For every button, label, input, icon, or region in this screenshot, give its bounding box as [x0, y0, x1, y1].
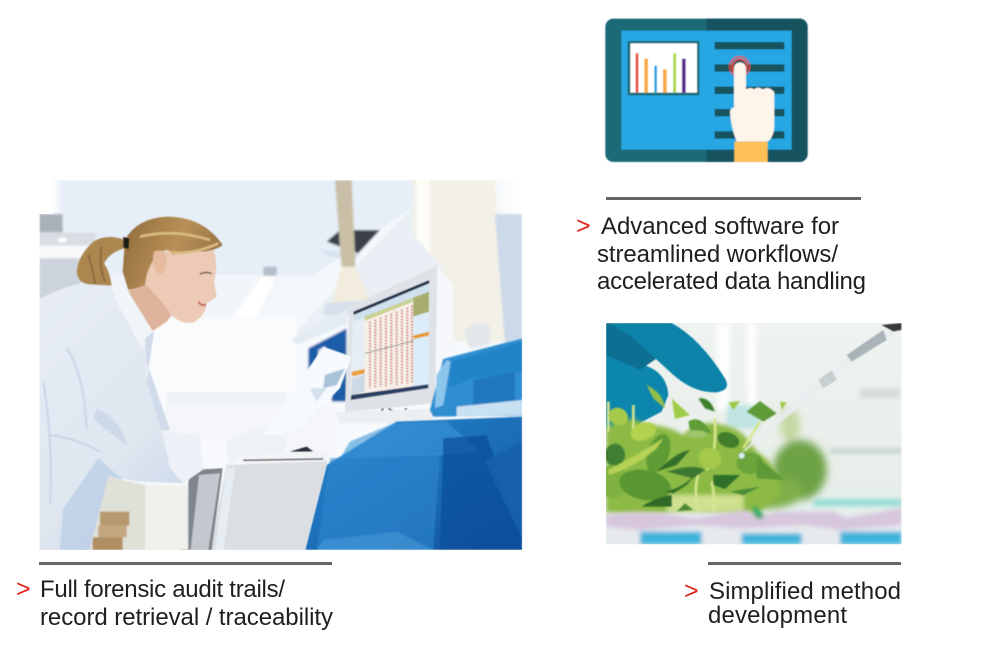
red chevron bullet: >: [684, 577, 699, 605]
pipette tip with droplet: [738, 323, 902, 459]
grey analyser housing: [180, 447, 330, 550]
multiwell plate: [606, 499, 902, 544]
photo: scientist at computer: [39, 180, 522, 550]
photo: pipette over seedlings: [598, 323, 902, 544]
woman in lab coat: [39, 217, 227, 550]
divider and caption: method development: development: [708, 602, 847, 629]
caption text: Full forensic audit trails/: [40, 576, 285, 603]
lower background cabinet and boxes: [88, 477, 190, 550]
divider and caption: advanced software: streamlined workflows/: [597, 241, 838, 268]
divider and caption: advanced software: accelerated data handling: [597, 268, 866, 295]
blue gloved fingers: [606, 323, 727, 432]
glove and printed report: [306, 346, 352, 402]
blue instrument: [305, 338, 522, 550]
computer monitor: [337, 266, 453, 423]
icon: tablet with touch screen chart: [605, 19, 808, 162]
blurred background foliage: [760, 404, 832, 513]
divider and caption: method development: [684, 562, 901, 629]
caption text: Simplified method: [709, 578, 901, 605]
caption text: Advanced software for: [601, 213, 839, 240]
divider and caption: audit trails: record retrieval / traceability: [40, 604, 333, 631]
red chevron bullet: >: [16, 575, 31, 603]
divider and caption: advanced software: [576, 197, 866, 295]
red chevron bullet: >: [576, 212, 591, 240]
divider and caption: audit trails: [16, 562, 333, 631]
green seedlings: [598, 385, 787, 513]
